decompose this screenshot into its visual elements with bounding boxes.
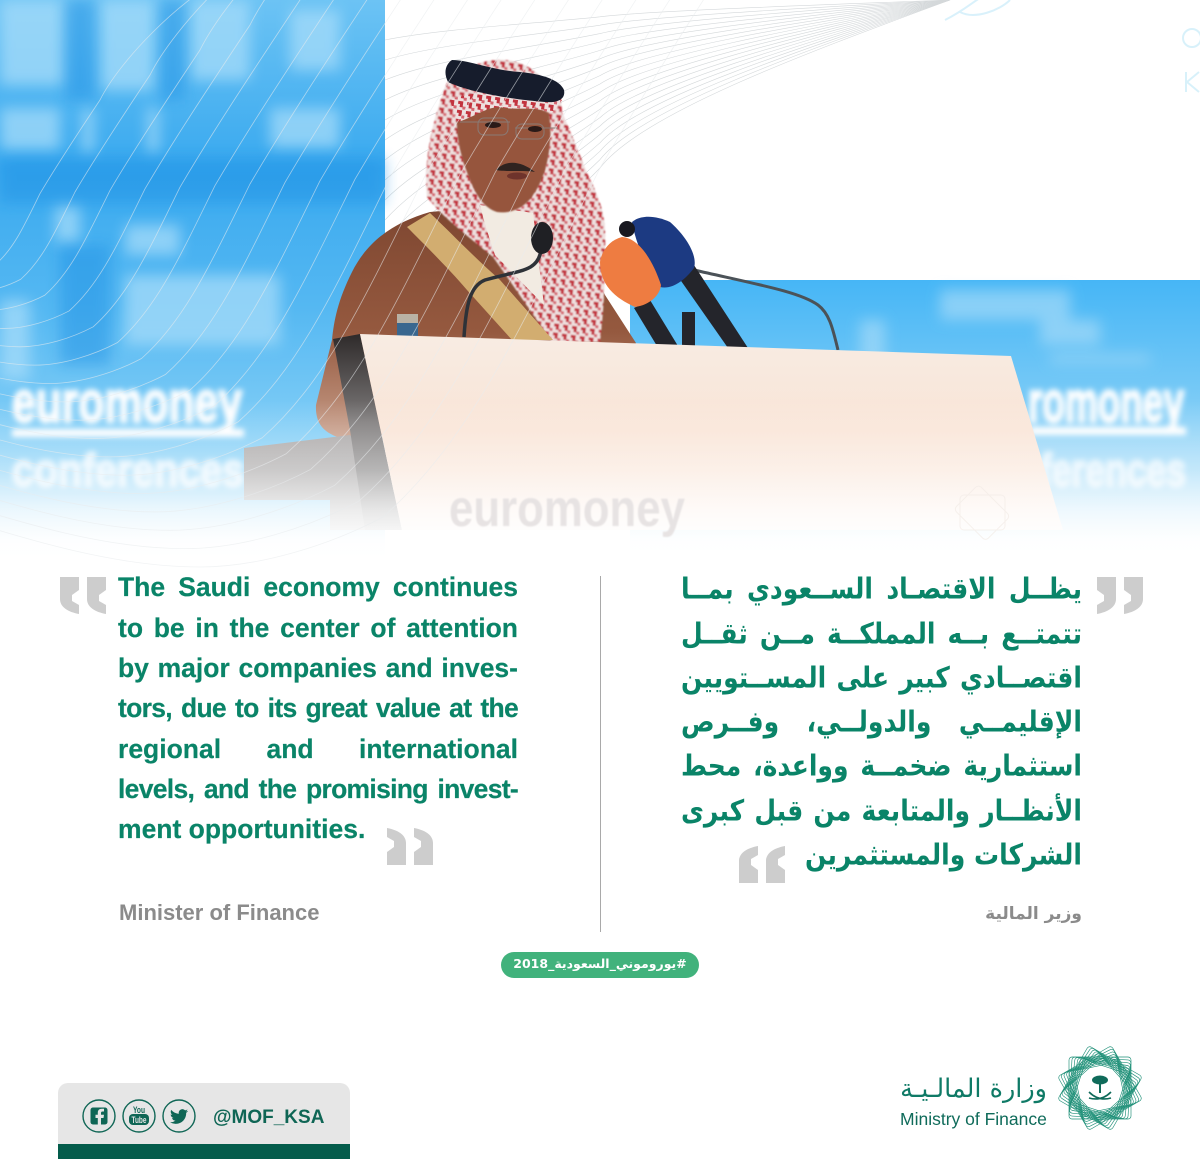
english quote panel bbox=[60, 572, 518, 925]
white thobe collar bbox=[480, 205, 544, 305]
icon: youtube: You bbox=[133, 1105, 145, 1115]
left blue screen bbox=[0, 0, 385, 560]
bottom white fade bbox=[0, 400, 1200, 560]
quote mark closing arabic bbox=[739, 846, 785, 883]
arabic quote panel bbox=[681, 572, 1143, 924]
social media panel bbox=[58, 1083, 350, 1159]
arabic quote panel: استثمارية ضخمــة وواعدة، محط bbox=[681, 749, 1082, 783]
english quote panel: regional and international bbox=[118, 734, 518, 764]
hashtag pill bbox=[501, 952, 699, 978]
podium faint rosette bbox=[954, 484, 1010, 541]
moustache and mouth bbox=[496, 163, 535, 172]
english quote panel: ment opportunities. bbox=[118, 814, 365, 844]
brow scarf fold bbox=[450, 91, 562, 122]
english quote panel: levels, and the promising invest- bbox=[118, 774, 518, 804]
podium euromoney mark: euromoney bbox=[449, 480, 685, 538]
podium bbox=[244, 334, 1063, 530]
podium shelf bbox=[244, 435, 400, 530]
arabic quote panel: تتمتــع بــه المملكــة مــن ثقــل bbox=[681, 617, 1082, 651]
icon: youtube: Tube bbox=[132, 1115, 146, 1125]
logo arabic wordmark: وزارة المالـيـة bbox=[900, 1074, 1047, 1104]
divider bbox=[600, 576, 601, 932]
agal bbox=[445, 60, 564, 102]
english quote panel: by major companies and inves- bbox=[118, 653, 518, 683]
logo emblem bbox=[1058, 1046, 1142, 1130]
microphone blue bbox=[632, 217, 695, 288]
logo english wordmark: Ministry of Finance bbox=[900, 1109, 1047, 1129]
social icons bbox=[82, 1099, 196, 1133]
right blue screen bbox=[630, 280, 1200, 550]
quote mark closing english bbox=[387, 828, 433, 865]
attribution english: Minister of Finance bbox=[119, 900, 319, 925]
face bbox=[457, 105, 550, 212]
arabic quote panel: يظــل الاقتصـاد الســعودي بمــا bbox=[681, 572, 1082, 606]
attribution arabic: وزير المالية bbox=[985, 904, 1082, 924]
social handle: @MOF_KSA bbox=[213, 1107, 324, 1128]
english quote panel: The Saudi economy continues bbox=[118, 572, 518, 602]
podium microphone left bbox=[464, 222, 553, 337]
ghutra headscarf bbox=[426, 60, 605, 342]
hashtag pill: #يوروموني_السعودية_2018 bbox=[513, 956, 687, 971]
arabic quote panel: اقتصــادي كبير على المســتويين bbox=[681, 661, 1082, 695]
sweeping contour lines bbox=[0, 0, 1200, 567]
english quote panel: tors, due to its great value at the bbox=[118, 693, 518, 723]
microphone orange bbox=[600, 237, 661, 307]
quote mark opening english bbox=[60, 577, 106, 614]
minister figure bbox=[316, 60, 838, 440]
podium front bbox=[360, 334, 1063, 530]
screen text: euromoney conferences left: euromoney bbox=[12, 370, 242, 435]
icon: twitter bbox=[163, 1100, 195, 1132]
quote mark opening arabic bbox=[1097, 577, 1143, 614]
emblem palm and swords bbox=[1092, 1076, 1108, 1093]
gray contour lines top right bbox=[385, 0, 950, 400]
arabic quote panel: الإقليمــي والدولــي، وفــرص bbox=[681, 705, 1082, 739]
microphone long right bbox=[694, 270, 838, 350]
microphone stems bbox=[634, 262, 748, 348]
robe bbox=[316, 200, 640, 440]
glasses and eyes bbox=[460, 118, 558, 139]
screen text: euromoney conferences left bbox=[12, 370, 244, 496]
screen text: euromoney conferences left: conferences bbox=[12, 444, 244, 496]
gold sash bbox=[407, 213, 553, 340]
water bottle bbox=[397, 314, 418, 336]
icon: facebook bbox=[83, 1100, 115, 1132]
photo scene: minister at podium bbox=[0, 0, 1200, 568]
english quote panel: to be in the center of attention bbox=[118, 613, 518, 643]
social bar bbox=[58, 1144, 350, 1159]
faint screen marks top right bbox=[945, 0, 1200, 92]
icon: youtube bbox=[123, 1100, 155, 1132]
podium side bbox=[333, 334, 402, 530]
ministry logo bbox=[900, 1046, 1142, 1130]
arabic quote panel: الأنظــار والمتابعة من قبل كبرى bbox=[681, 794, 1082, 828]
arabic quote panel: الشركات والمستثمرين bbox=[805, 838, 1082, 872]
